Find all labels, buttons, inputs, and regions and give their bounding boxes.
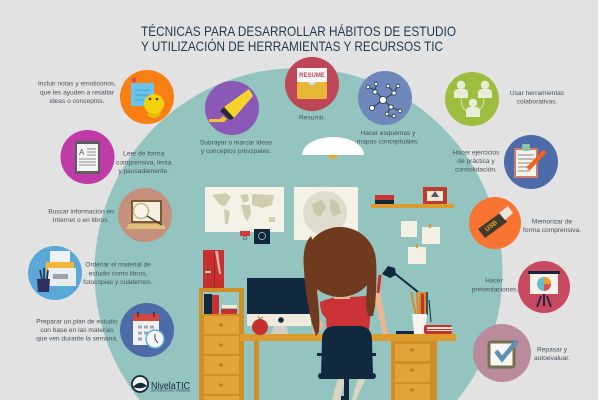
text: repasar: Repasar y bbox=[537, 346, 568, 353]
text: presentaciones: Hacer bbox=[485, 278, 504, 285]
icon: document: A bbox=[79, 148, 85, 157]
text: ejercicios: de práctica y bbox=[457, 158, 495, 165]
text: memorizar: forma comprensiva. bbox=[523, 227, 581, 234]
text: subrayar: Subrayar o marcar ideas bbox=[200, 139, 273, 146]
shirt bbox=[320, 295, 372, 332]
item: notas y emoticonos bbox=[38, 70, 174, 124]
text: esquemas bbox=[357, 130, 419, 146]
chair bbox=[317, 326, 376, 400]
title: TÉCNICAS PARA DESARROLLAR HÁBITOS DE ESTUDIO bbox=[141, 23, 456, 39]
item: colaborativas bbox=[445, 72, 565, 126]
text: ordenar: estudio como libros, bbox=[89, 270, 147, 277]
text: plan: con base en las materias bbox=[40, 327, 114, 334]
text: leer: Leer de forma bbox=[123, 151, 165, 158]
item: ordenar material bbox=[28, 246, 153, 300]
text: notas bbox=[38, 81, 116, 105]
icon: USB drive: USB bbox=[484, 219, 499, 233]
text: notas: ideas o conceptos. bbox=[50, 98, 105, 105]
clip and sticky bbox=[240, 229, 270, 244]
text: esquemas: Hacer esquemas y bbox=[361, 130, 416, 137]
icon: three people connected bbox=[445, 72, 499, 126]
wall shelf bbox=[371, 187, 454, 208]
icon: presentation board bbox=[518, 261, 570, 313]
world map poster bbox=[205, 187, 284, 232]
text: buscar: Internet o en libros. bbox=[53, 217, 109, 224]
text: buscar: Buscar información en bbox=[48, 208, 114, 215]
logo bbox=[132, 376, 190, 392]
text: memorizar: Memorizar de bbox=[532, 219, 572, 226]
text: colaborativas: colaborativas. bbox=[517, 99, 558, 106]
icon: laptop with magnifier bbox=[118, 188, 172, 242]
pinned notes bbox=[401, 221, 440, 264]
text: colaborativas bbox=[510, 90, 565, 106]
item: ejercicios bbox=[453, 135, 558, 189]
text: notas: Incluir notas y emoticonos, bbox=[38, 81, 116, 88]
text: ordenar bbox=[83, 262, 153, 286]
item: repasar bbox=[473, 324, 570, 382]
item: plan de estudio bbox=[36, 303, 174, 357]
red binders bbox=[203, 250, 224, 288]
item: esquemas bbox=[357, 71, 419, 146]
item: memorizar bbox=[469, 197, 581, 249]
arms bbox=[312, 290, 388, 334]
text: ordenar: fotocopias y cuadernos. bbox=[83, 279, 153, 286]
text: resumir: Resumir. bbox=[299, 115, 325, 122]
computer monitor bbox=[247, 278, 311, 334]
icon: resume folder: RESUME bbox=[299, 73, 325, 79]
icon: sticky note and emoji bbox=[120, 70, 174, 124]
title: Y UTILIZACIÓN DE HERRAMIENTAS Y RECURSOS TIC bbox=[141, 38, 443, 54]
desk bbox=[240, 334, 456, 400]
hair bbox=[304, 227, 376, 336]
text: notas: que les ayuden a resaltar bbox=[40, 89, 115, 96]
icon: highlighter bbox=[205, 81, 259, 135]
text: repasar: autoevaluar. bbox=[534, 355, 570, 362]
text: presentaciones bbox=[472, 278, 518, 294]
books on desk bbox=[424, 325, 452, 334]
ceiling lamp bbox=[302, 137, 364, 159]
text: leer: y pausadamente. bbox=[118, 168, 169, 175]
bookcase with drawers bbox=[199, 288, 244, 400]
student at desk bbox=[304, 227, 388, 400]
globe poster bbox=[294, 187, 358, 240]
text: subrayar: y conceptos principales. bbox=[201, 148, 271, 155]
legs bbox=[332, 378, 366, 400]
pencil cup and pencils bbox=[411, 292, 431, 334]
pencil in hand bbox=[378, 275, 380, 293]
item: resumir bbox=[285, 57, 339, 122]
text: subrayar bbox=[200, 139, 273, 155]
icon: network diagram bbox=[358, 71, 412, 125]
teal background circle bbox=[94, 68, 503, 400]
text: colaborativas: Usar herramientas bbox=[510, 90, 565, 97]
neck bbox=[334, 291, 350, 299]
logo: NivelaTIC bbox=[151, 381, 190, 392]
text: memorizar bbox=[523, 219, 581, 234]
text: plan bbox=[36, 318, 118, 343]
text: ejercicios: Hacer ejercicios bbox=[453, 149, 500, 156]
apple bbox=[252, 316, 268, 335]
text: leer bbox=[116, 151, 172, 175]
logo: CENTRO DE ESTUDIOS Y APRENDIZAJE bbox=[151, 390, 190, 392]
desk lamp bbox=[382, 266, 418, 334]
item: buscar información bbox=[48, 188, 172, 242]
text: ejercicios bbox=[453, 149, 500, 174]
text: ordenar: Ordenar el material de bbox=[85, 262, 151, 269]
item: presentaciones bbox=[472, 261, 570, 313]
text: repasar bbox=[534, 346, 570, 362]
text: esquemas: mapas conceptuales. bbox=[357, 139, 419, 146]
text: presentaciones: presentaciones. bbox=[472, 287, 518, 294]
item: leer bbox=[60, 130, 172, 184]
text: plan: Preparar un plan de estudio bbox=[36, 318, 118, 325]
text: buscar bbox=[48, 208, 114, 224]
icon: calendar and clock bbox=[120, 303, 174, 357]
item: subrayar bbox=[200, 81, 273, 155]
text: leer: comprensiva, lenta bbox=[116, 159, 172, 166]
icon: clipboard and pencil bbox=[504, 135, 558, 189]
icon: folder and pencil cup bbox=[28, 246, 82, 300]
text: plan: que ven durante la semana. bbox=[36, 336, 118, 343]
text: ejercicios: consolidación. bbox=[455, 167, 497, 174]
title bbox=[141, 23, 456, 54]
icon: check box bbox=[473, 324, 531, 382]
